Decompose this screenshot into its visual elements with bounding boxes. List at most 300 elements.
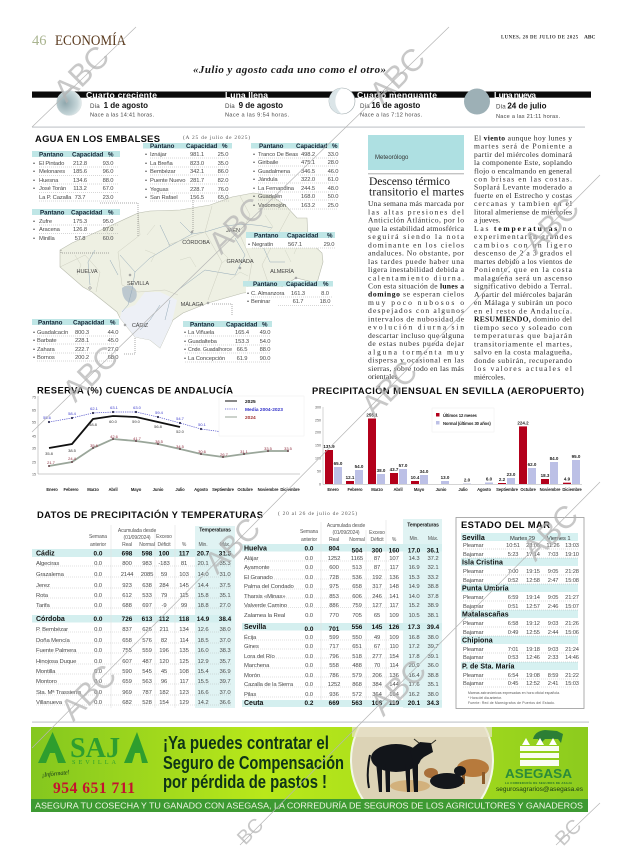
heading: precipitación mensual: PRECIPITACIÓN MENSUAL EN SEVILLA (AEROPUERTO) — [312, 385, 584, 396]
table: Huelva, Sevilla y Ceuta: 504 — [352, 548, 363, 554]
table: Huelva north reservoirs: Huesna — [39, 178, 59, 184]
watermark: ABC precipitación: ABC — [354, 353, 424, 423]
table: Huelva, Sevilla y Ceuta: Morón — [244, 673, 260, 679]
article body right column: martes debido a los vientos de — [474, 257, 573, 266]
table: Cádiz y Córdoba: 16.6 — [198, 690, 209, 696]
phase: cuarto creciente: Día 1 de agosto — [90, 101, 148, 110]
table: Córdoba reservoirs: 35.0 — [218, 161, 228, 167]
phase: luna llena — [225, 90, 289, 118]
tide rows: Sevilla: 5:23 — [508, 552, 518, 558]
table: Huelva north reservoirs: 185.6 — [73, 169, 87, 175]
y axis: 250 — [315, 418, 321, 422]
tide rows: Punta Umbría: 12:57 — [526, 604, 540, 610]
table: Huelva, Sevilla y Ceuta: 37.8 — [428, 594, 439, 600]
table: Jaén reservoirs: Guadalmena — [258, 169, 291, 175]
series: 2025: 56.8 — [154, 424, 163, 429]
table: Huelva sierra reservoirs: 60.0 — [103, 236, 113, 242]
table: Granada reservoirs: 29.0 — [324, 242, 334, 248]
ASAJA phone contact — [41, 769, 135, 797]
table: Cádiz y Córdoba: 12.9 — [198, 659, 208, 665]
tide rows: Isla Cristina: 12:58 — [526, 578, 540, 584]
table: Granada reservoirs: Pantano — [254, 232, 279, 239]
table: Cádiz y Córdoba: 154 — [159, 700, 170, 706]
table: Almería reservoirs: 18.0 — [320, 299, 330, 305]
tide rows: P. de Sta. María: 15:03 — [565, 681, 579, 687]
table: Huelva sierra reservoirs: % — [108, 209, 114, 216]
table: Huelva, Sevilla y Ceuta: 38.9 — [428, 603, 438, 609]
table: Málaga reservoirs: 90.0 — [260, 356, 270, 362]
phase: luna nueva: Luna nueva — [494, 90, 536, 100]
table: Cádiz y Córdoba: 18.8 — [198, 603, 209, 609]
table: Huelva, Sevilla y Ceuta: 109 — [389, 635, 399, 641]
article body right column: con brisas en las costas. — [474, 174, 572, 184]
tide rows: Chipiona: Pleamar — [463, 647, 484, 653]
table: Granada reservoirs: % — [327, 232, 333, 239]
table: Huelva sierra reservoirs: 95.0 — [103, 219, 113, 225]
table: Cádiz y Córdoba: 129 — [179, 700, 189, 706]
map city labels: ALMERÍA — [270, 268, 294, 275]
table: Málaga reservoirs: La Concepción — [188, 356, 225, 362]
table: Cádiz y Córdoba: 135 — [179, 648, 190, 654]
ad headline: por pérdida de pastos ! — [163, 772, 327, 792]
table: Huelva, Sevilla y Ceuta: 16.4 — [408, 673, 420, 679]
table: Huelva, Sevilla y Ceuta: Lora del Río — [244, 654, 275, 660]
table: Cádiz y Córdoba: 698 — [122, 550, 133, 558]
table: Cádiz y Córdoba: 16.0 — [198, 648, 209, 654]
article body right column: a jueves. — [474, 216, 501, 225]
legend: 2024 — [245, 415, 256, 421]
table: Cádiz y Córdoba: 108 — [179, 669, 190, 675]
table: Huelva, Sevilla y Ceuta: 804 — [329, 546, 340, 552]
table: Huelva sierra reservoirs: 175.3 — [73, 219, 87, 225]
moon: cuarto menguante — [329, 88, 355, 114]
table: Cádiz reservoirs: 222.7 — [75, 347, 89, 353]
table: Cádiz y Córdoba: Hinojosa Duque — [36, 659, 77, 665]
ad headline — [163, 733, 344, 792]
table: Huelva, Sevilla y Ceuta: 277 — [372, 654, 382, 660]
bars: normal últimos 30 años — [334, 460, 580, 484]
ASAJA logo: SEVILLA — [72, 759, 117, 766]
article headline: transitorio el martes — [369, 186, 464, 198]
table: Málaga reservoirs: La Viñuela — [188, 330, 215, 336]
phase: luna nueva — [494, 90, 560, 120]
y axis and baseline — [32, 396, 300, 476]
table: Jaén reservoirs: 25.0 — [328, 203, 338, 209]
article body right column: cambios con un ligero — [474, 240, 572, 249]
table: Cádiz y Córdoba: 14.0 — [198, 572, 209, 578]
table: Huelva sierra reservoirs: Zufre — [39, 219, 52, 225]
table: Córdoba reservoirs: 281.7 — [190, 178, 204, 184]
series: 2024: 30.6 — [198, 449, 207, 454]
bar value labels: 65.0 — [334, 461, 343, 466]
table: Cádiz y Córdoba: 658 — [122, 638, 133, 644]
strip background — [32, 92, 591, 98]
table: Cádiz y Córdoba: 559 — [142, 648, 152, 654]
article body right column: RESUMIENDO, dominio del — [474, 315, 572, 324]
table: Cádiz y Córdoba: 103 — [179, 572, 190, 578]
article body right column: martes será de Poniente a — [474, 142, 573, 150]
tide rows: Sevilla: 19:10 — [565, 552, 579, 558]
table: Huelva, Sevilla y Ceuta: 0.0 — [305, 654, 314, 660]
article body left column: las tardes puede haber una — [368, 257, 465, 266]
table: Granada reservoirs: • — [248, 242, 250, 248]
table: Cádiz y Córdoba: 14.9 — [197, 616, 210, 623]
footnotes: Fuente: Red de Mareógrafos de Puertos del Estado. — [468, 701, 555, 705]
month labels: Septiembre — [496, 487, 519, 492]
month labels: Septiembre — [212, 487, 235, 492]
table: Málaga reservoirs: 153.3 — [235, 339, 249, 345]
month labels: Noviembre — [540, 487, 561, 492]
table: Huelva, Sevilla y Ceuta: 17.0 — [408, 548, 421, 554]
series: 2024: 38.5 — [155, 439, 164, 444]
series: media 2004-2023: 47.0 — [240, 426, 249, 431]
ASAJA phone contact: ¡Infórmate! — [41, 769, 70, 779]
phase: cuarto menguante: Día 16 de agosto — [360, 101, 420, 110]
table: Cádiz y Córdoba: 0.0 — [94, 679, 103, 685]
legend — [432, 408, 494, 432]
tide rows: Chipiona — [462, 638, 579, 661]
table: Cádiz y Córdoba: 969 — [122, 690, 132, 696]
table: Huelva, Sevilla y Ceuta: 536 — [352, 575, 363, 581]
table: Huelva north reservoirs: 88.0 — [103, 178, 113, 184]
heading: reserva: RESERVA (%) CUENCAS DE ANDALUCÍA — [37, 384, 233, 396]
table: Cádiz reservoirs: 200.2 — [75, 355, 89, 361]
ASAJA logo — [38, 732, 148, 766]
table: Córdoba reservoirs: Puente Nuevo — [150, 178, 185, 184]
bar value labels: 2.2 — [499, 477, 506, 482]
table: Cádiz y Córdoba: 117 — [179, 550, 190, 558]
table: Cádiz y Córdoba: 38.0 — [220, 627, 231, 633]
y axis and baseline: 65 — [32, 408, 36, 412]
table: Huelva north reservoirs: 73.7 — [75, 195, 85, 201]
tide rows: Punta Umbría: Punta Umbría — [462, 586, 509, 592]
column headers: Temperaturas — [407, 522, 439, 528]
column headers: Semana — [89, 534, 107, 540]
tide rows: P. de Sta. María: Pleamar — [463, 673, 484, 679]
table: Huelva, Sevilla y Ceuta: 127 — [372, 603, 382, 609]
month labels: Diciembre — [562, 487, 582, 492]
phase: cuarto creciente: Nace a las 14:41 horas. — [90, 112, 154, 118]
table: Cádiz y Córdoba: 0.0 — [94, 659, 103, 665]
table: Córdoba reservoirs: • — [145, 195, 147, 201]
table: Cádiz y Córdoba: Sta. Mª Trassierra — [36, 689, 82, 696]
table: Cádiz y Córdoba: -183 — [158, 561, 170, 567]
article body left column: Una semana más marcada por — [368, 199, 464, 208]
table: Huelva, Sevilla y Ceuta: 164 — [389, 692, 400, 698]
table: Huelva, Sevilla y Ceuta: 0.0 — [305, 613, 314, 619]
series: media 2004-2023: 59.4 — [155, 410, 164, 415]
phase: luna llena: Día 9 de agosto — [225, 101, 283, 110]
table: Huelva, Sevilla y Ceuta: 39.7 — [428, 644, 438, 650]
table: Huelva, Sevilla y Ceuta: 563 — [352, 700, 363, 707]
table: Cádiz y Córdoba: 15.4 — [198, 669, 209, 675]
watermark: ABC tabla derecha: ABC — [363, 652, 433, 722]
table: Cádiz y Córdoba: 115 — [179, 593, 189, 599]
tide rows: Sevilla — [463, 543, 579, 558]
page number and section heading — [32, 32, 126, 49]
article body right column: flojo o encalmando en general — [474, 166, 572, 175]
column headers: Máx. — [428, 536, 438, 542]
table: Jaén reservoirs: Vadomojón — [258, 203, 286, 209]
table: Huelva north reservoirs: 113.2 — [73, 186, 87, 192]
table: Huelva, Sevilla y Ceuta: 117 — [389, 565, 399, 571]
table: Cádiz y Córdoba: 787 — [142, 690, 152, 696]
table: Cádiz y Córdoba: 31.0 — [220, 572, 231, 578]
column headers: Máx. — [220, 542, 230, 548]
tide rows: Punta Umbría: Pleamar — [463, 595, 484, 601]
series: media 2004-2023: 63.0 — [133, 405, 142, 410]
series: 2024: 42.6 — [110, 434, 119, 439]
table: Huelva, Sevilla y Ceuta: 20.9 — [408, 663, 420, 669]
phase: cuarto creciente: Cuarto creciente — [86, 90, 157, 100]
table: Cádiz y Córdoba: 15.5 — [198, 679, 209, 685]
table: Huelva sierra reservoirs: • — [33, 219, 35, 225]
article body left column: sierras, sobre todo en las más — [368, 364, 464, 373]
tide rows: P. de Sta. María: 12:52 — [526, 681, 540, 687]
port bands — [461, 533, 578, 670]
table: Huelva, Sevilla y Ceuta: 117 — [389, 603, 399, 609]
table: Jaén reservoirs — [251, 143, 339, 209]
column headers: (01/09/2024) — [333, 530, 360, 536]
table: Cádiz reservoirs: • — [33, 330, 35, 336]
tide rows: Isla Cristina: 9:05 — [548, 569, 558, 575]
article body left column: ligera inestabilidad debida a — [368, 265, 465, 274]
tide rows: P. de Sta. María: Bajamar — [463, 681, 484, 687]
table: Huelva, Sevilla y Ceuta: 110 — [389, 644, 399, 650]
month labels: Abril — [393, 487, 403, 492]
table: Huelva, Sevilla y Ceuta: 1165 — [351, 556, 364, 562]
bar value labels — [323, 412, 581, 482]
series: 2024: 24.4 — [68, 456, 77, 461]
table: Huelva, Sevilla y Ceuta: Huelva — [244, 546, 267, 552]
table: Córdoba reservoirs: • — [145, 161, 147, 167]
table: Huelva, Sevilla y Ceuta: El Granado — [244, 575, 273, 581]
series: media 2004-2023: 50.1 — [198, 422, 207, 427]
table: Cádiz y Córdoba: 117 — [179, 679, 189, 685]
article body right column: temperaturas que bajarán — [474, 331, 572, 340]
article body right column: transitoriamente el martes, — [474, 339, 572, 348]
table: Huelva, Sevilla y Ceuta: 488 — [352, 663, 363, 669]
table: Huelva, Sevilla y Ceuta: 148 — [389, 584, 400, 590]
article body right column: fuerte en el Estrecho y costas — [474, 191, 572, 200]
table: Cádiz y Córdoba: 123 — [179, 690, 190, 696]
y axis and baseline: 75 — [32, 396, 36, 400]
table: Cádiz y Córdoba: 31.5 — [219, 550, 232, 558]
column headers: Exceso — [369, 530, 385, 536]
panel: datos de precipitación y temperaturas — [32, 509, 442, 708]
table: Jaén reservoirs: 163.2 — [301, 203, 315, 209]
tide rows: Chipiona: 2:33 — [548, 655, 558, 661]
table: Huelva, Sevilla y Ceuta: 32.1 — [428, 565, 438, 571]
series: media 2004-2023: 47.3 — [264, 426, 273, 431]
map city labels: SEVILLA — [127, 281, 149, 287]
table: Huelva, Sevilla y Ceuta: 658 — [352, 584, 363, 590]
article body right column: Soplará Levante moderado a — [474, 183, 573, 192]
table: Cádiz y Córdoba: Algeciras — [36, 561, 59, 567]
table: Córdoba reservoirs: Capacidad — [186, 143, 218, 150]
phase: cuarto creciente — [86, 90, 157, 118]
table: Cádiz y Córdoba: 0.0 — [94, 593, 103, 599]
table: Málaga reservoirs: Cnde. Guadalhorce — [188, 347, 232, 353]
table: Málaga reservoirs — [183, 321, 272, 362]
moon: cuarto creciente — [56, 90, 82, 116]
legend: Últimos 12 meses — [443, 413, 478, 418]
table: Huelva north reservoirs: • — [33, 186, 35, 192]
table: Almería reservoirs: 61.7 — [293, 299, 303, 305]
table: Huelva, Sevilla y Ceuta: 37.2 — [428, 556, 438, 562]
table: Huelva, Sevilla y Ceuta: 15.3 — [408, 575, 420, 581]
y axis: 150 — [315, 444, 321, 448]
table: Huelva, Sevilla y Ceuta: 518 — [352, 654, 363, 660]
article body right column: miércoles. — [474, 372, 506, 381]
column headers: Real — [122, 542, 132, 548]
column headers: Temperaturas — [199, 528, 231, 534]
table: Jaén reservoirs: 244.5 — [301, 186, 315, 192]
watermark: ABC reserva: ABC — [55, 338, 125, 408]
table: Huelva, Sevilla y Ceuta: 0.0 — [305, 644, 314, 650]
month labels: Julio — [458, 487, 468, 492]
table: Cádiz y Córdoba — [32, 525, 235, 708]
table: Cádiz y Córdoba: 37.0 — [220, 690, 231, 696]
bar value labels: 6.0 — [486, 476, 493, 482]
article body right column: salvo en la costa malagueña, — [474, 348, 572, 356]
table: Cádiz y Córdoba: 2085 — [141, 572, 154, 578]
article body right column: Las temperaturas no — [474, 224, 572, 233]
article body right column: El viento aunque hoy lunes y — [474, 133, 572, 142]
map city labels: HUELVA — [77, 269, 98, 275]
bar value labels: 62.0 — [528, 462, 537, 467]
table: Jaén reservoirs: La Fernandina — [258, 186, 295, 192]
bar value labels: 84.0 — [550, 456, 559, 461]
table: Jaén reservoirs: Pantano — [259, 143, 284, 150]
table: Huelva, Sevilla y Ceuta: 0.0 — [305, 673, 314, 679]
series: media 2004-2023: 58.4 — [68, 411, 77, 416]
table: Cádiz y Córdoba: 2144 — [121, 572, 134, 578]
table: Córdoba reservoirs: • — [145, 178, 147, 184]
bar value labels: 10.4 — [411, 475, 420, 480]
table: Málaga reservoirs: 88.0 — [260, 347, 270, 353]
phase: cuarto menguante — [357, 90, 437, 118]
series: 2024: 33.5 — [264, 446, 273, 451]
table: Huelva, Sevilla y Ceuta: 606 — [352, 594, 363, 600]
table: Cádiz y Córdoba: 682 — [122, 700, 132, 706]
table: Córdoba reservoirs: 82.0 — [218, 178, 228, 184]
table: Cádiz y Córdoba: 81 — [181, 561, 187, 567]
table: Huelva, Sevilla y Ceuta: Gines — [244, 644, 259, 650]
table: Huelva, Sevilla y Ceuta: 70 — [374, 663, 381, 669]
series: 2024: 35.6 — [90, 443, 99, 448]
author box: Meteorólogo — [375, 155, 409, 161]
article body right column: malagueña será un ascenso — [474, 273, 572, 282]
table: Granada reservoirs: 567.1 — [288, 242, 302, 248]
table: Córdoba reservoirs: • — [145, 152, 147, 158]
table: Cádiz y Córdoba: Grazalema — [36, 572, 65, 578]
table: Cádiz y Córdoba: 112 — [159, 616, 170, 623]
table: Huelva, Sevilla y Ceuta: 770 — [329, 613, 340, 619]
table: Cádiz reservoirs: Barbate — [37, 338, 56, 344]
y axis and baseline: 15 — [32, 472, 36, 476]
table: Cádiz y Córdoba: 0.0 — [94, 669, 103, 675]
tide rows: Chipiona: 12:46 — [526, 655, 540, 661]
tide rows: Matalascañas: 9:03 — [548, 621, 558, 627]
phase: luna llena: Luna llena — [225, 90, 268, 100]
table: Cádiz reservoirs: • — [33, 347, 35, 353]
column headers: % — [182, 542, 187, 548]
map city labels: GRANADA — [227, 259, 254, 265]
table: Huelva, Sevilla y Ceuta: 16.9 — [408, 565, 420, 571]
tide rows: Chipiona: 9:03 — [548, 647, 558, 653]
table: Cádiz y Córdoba: 14.4 — [198, 583, 209, 589]
panel frame — [456, 518, 584, 708]
article body right column: significativo debido a Terral. — [474, 282, 572, 291]
table: Córdoba reservoirs: 25.0 — [218, 152, 228, 158]
table: Huelva, Sevilla y Ceuta: 579 — [352, 673, 362, 679]
ad headline: ¡Ya puedes contratar el — [163, 733, 329, 753]
tide rows: Sevilla: 17:14 — [526, 552, 540, 558]
table: Cádiz y Córdoba: 79 — [161, 593, 167, 599]
table: Córdoba reservoirs: 981.1 — [190, 152, 204, 158]
table: Huelva, Sevilla y Ceuta: 0.2 — [305, 700, 314, 707]
bar value labels: 57.0 — [399, 463, 408, 468]
table: Jaén reservoirs: 498.2 — [301, 152, 315, 158]
table: Cádiz y Córdoba: 59 — [161, 572, 167, 578]
table: Huelva north reservoirs: 23.0 — [103, 195, 113, 201]
tide rows: Chipiona: 0:53 — [508, 655, 518, 661]
footnotes — [468, 691, 560, 705]
table: Cádiz y Córdoba: 837 — [122, 627, 132, 633]
table: Huelva, Sevilla y Ceuta: 0.0 — [305, 663, 314, 669]
table: Huelva, Sevilla y Ceuta: 886 — [329, 603, 340, 609]
tide rows: Punta Umbría: 19:14 — [526, 595, 540, 601]
table: Huelva, Sevilla y Ceuta: 107 — [389, 556, 399, 562]
table: Cádiz reservoirs: Bornos — [37, 355, 55, 361]
table: Cádiz y Córdoba: 923 — [122, 583, 133, 589]
table: Córdoba reservoirs: 86.0 — [218, 169, 228, 175]
table: Huelva, Sevilla y Ceuta: 975 — [329, 584, 340, 590]
month labels: Junio — [436, 487, 447, 492]
table: Huelva, Sevilla y Ceuta: 39.4 — [427, 624, 440, 631]
table: Huelva, Sevilla y Ceuta: 87 — [374, 556, 380, 562]
table: Cádiz reservoirs: 68.0 — [108, 355, 118, 361]
day headers — [462, 535, 570, 542]
bars: últimos 12 meses — [325, 418, 571, 484]
table: Huelva, Sevilla y Ceuta: 109 — [389, 613, 399, 619]
panel: estado del mar — [456, 518, 584, 708]
month labels: Febrero — [64, 487, 79, 492]
tide rows: Sevilla: Bajamar — [463, 552, 484, 558]
table: Cádiz y Córdoba: 0.0 — [94, 603, 103, 609]
table: Huelva, Sevilla y Ceuta: 0.0 — [305, 692, 314, 698]
series: media 2004-2023: 55.6 — [43, 415, 52, 420]
table: Almería reservoirs: C. Almanzora — [251, 291, 285, 297]
table: Huelva, Sevilla y Ceuta: 38.0 — [428, 635, 439, 641]
table: Huelva, Sevilla y Ceuta: Alájar — [244, 556, 258, 562]
column headers — [89, 528, 231, 548]
table: Huelva, Sevilla y Ceuta: 17.2 — [408, 644, 420, 650]
table: Cádiz y Córdoba: 35.7 — [220, 659, 230, 665]
tide rows: Isla Cristina: 0:52 — [508, 578, 518, 584]
table: Huelva north reservoirs: • — [33, 178, 35, 184]
legend: Media 2004-2023 — [245, 407, 283, 413]
table: Cádiz y Córdoba: 638 — [142, 583, 153, 589]
month labels: Abril — [108, 487, 118, 492]
table: Cádiz y Córdoba: 0.0 — [94, 627, 103, 633]
series: media 2004-2023: 47.6 — [220, 425, 229, 430]
date note: (A 25 de julio de 2025) — [183, 134, 250, 141]
series: 2024: 33.5 — [284, 446, 293, 451]
article body left column: despejados con algunos — [368, 306, 464, 315]
table: Córdoba reservoirs: 823.0 — [190, 161, 204, 167]
